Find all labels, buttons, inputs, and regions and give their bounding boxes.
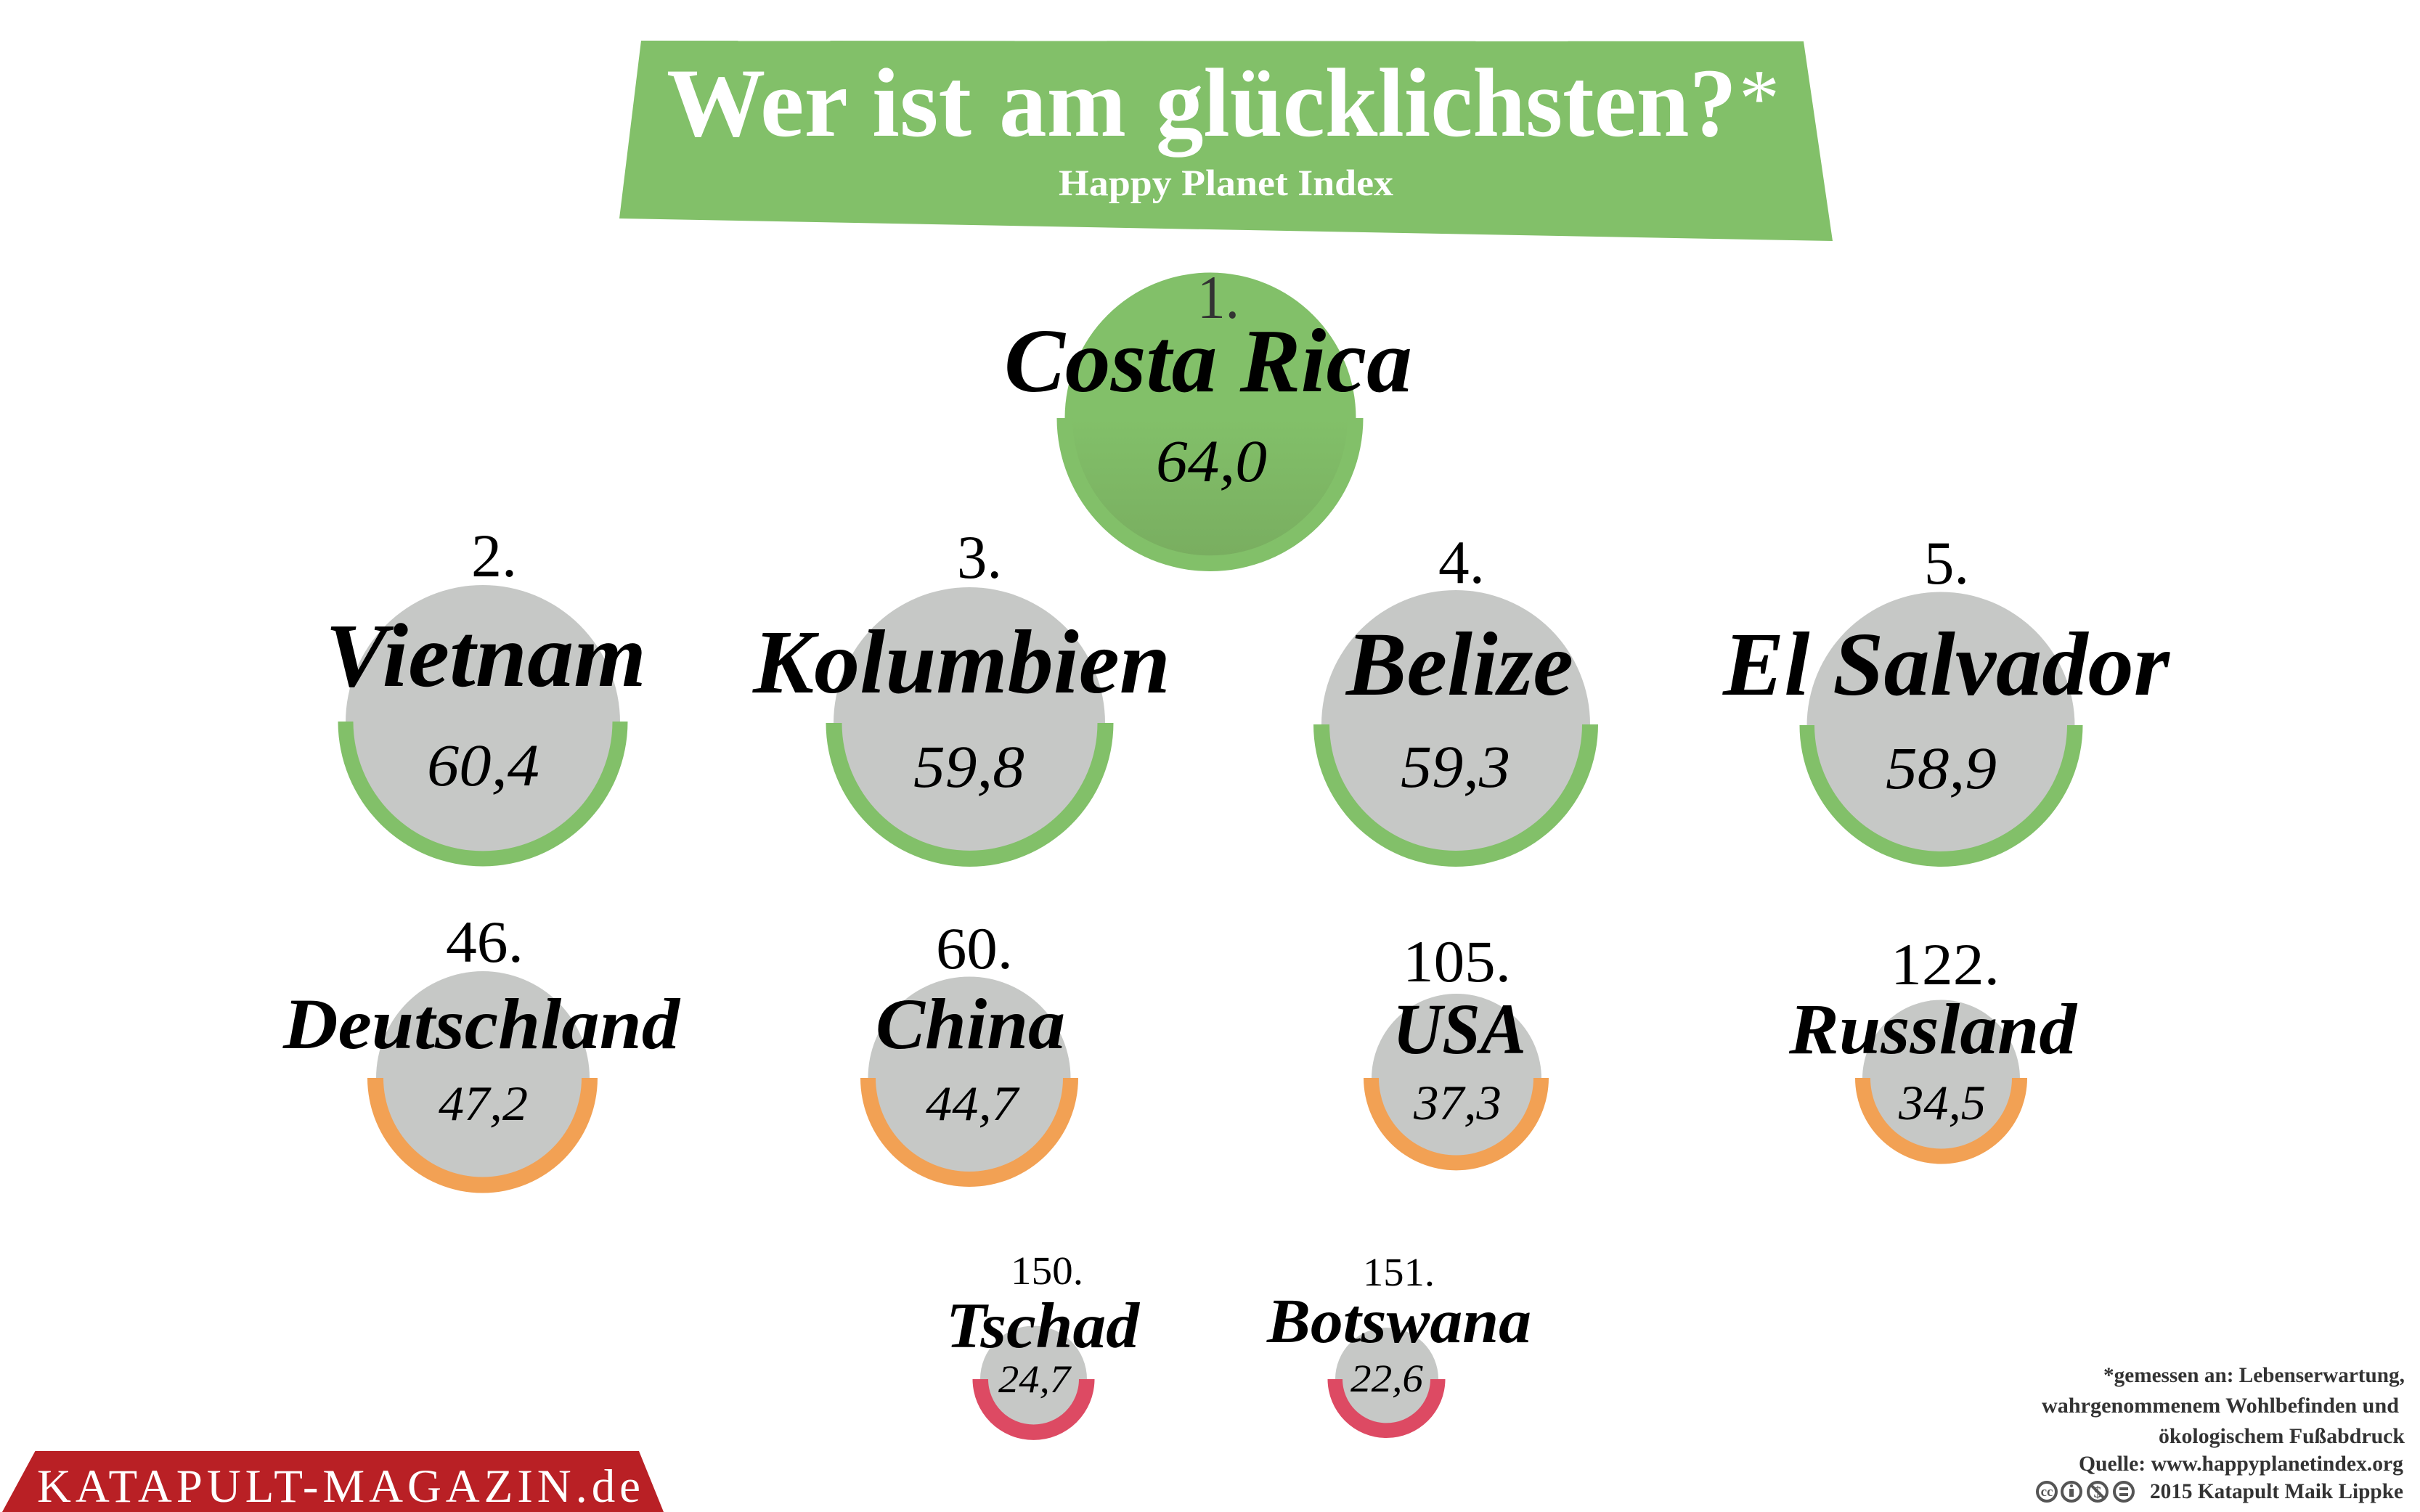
title asterisk: * bbox=[1739, 54, 1780, 144]
value: 44,7 bbox=[926, 1076, 1020, 1131]
ring bbox=[338, 722, 627, 867]
ring bbox=[1313, 724, 1598, 867]
rank: 150. bbox=[1011, 1249, 1083, 1293]
value: 64,0 bbox=[1156, 428, 1267, 494]
footnote and source bbox=[2037, 1363, 2405, 1503]
country: Belize bbox=[1313, 528, 1598, 867]
ring bbox=[1364, 1078, 1549, 1170]
value: 59,3 bbox=[1401, 733, 1510, 800]
name: USA bbox=[1393, 989, 1526, 1069]
name: El Salvador bbox=[1722, 615, 2170, 715]
score circle bbox=[1321, 590, 1590, 859]
country: Russland bbox=[1788, 931, 2078, 1164]
value: 34,5 bbox=[1898, 1075, 1986, 1130]
ring bbox=[973, 1379, 1095, 1440]
ring bbox=[367, 1078, 598, 1193]
ring bbox=[1327, 1379, 1445, 1438]
name: Kolumbien bbox=[752, 613, 1170, 713]
rank: 60. bbox=[936, 915, 1013, 981]
name: Belize bbox=[1345, 615, 1573, 715]
value: 59,8 bbox=[913, 733, 1024, 800]
ring bbox=[826, 723, 1114, 867]
country: Deutschland bbox=[282, 909, 681, 1193]
title: ist bbox=[872, 49, 971, 158]
rank: 2. bbox=[471, 522, 517, 590]
value: 22,6 bbox=[1350, 1357, 1423, 1400]
rank: 1. bbox=[1197, 263, 1239, 332]
footnote line 3: ökologischem Fußabdruck bbox=[2159, 1424, 2405, 1448]
country: Tschad bbox=[946, 1249, 1141, 1440]
score circle bbox=[1806, 592, 2075, 859]
name: Russland bbox=[1788, 989, 2078, 1069]
banner shape bbox=[619, 41, 1833, 241]
footnote line 2: wahrgenommenem Wohlbefinden und bbox=[2042, 1394, 2399, 1418]
rank: 122. bbox=[1891, 931, 2000, 997]
icon: cc letters: cc bbox=[2041, 1484, 2053, 1500]
score circle bbox=[868, 977, 1070, 1179]
name: China bbox=[876, 984, 1065, 1064]
value: 58,9 bbox=[1886, 735, 1997, 801]
ring bbox=[1057, 418, 1364, 571]
score circle bbox=[1862, 1000, 2020, 1157]
name: Costa Rica bbox=[1004, 311, 1412, 412]
subtitle: Happy Planet Index bbox=[1059, 163, 1394, 204]
title: am bbox=[999, 49, 1126, 158]
country: Botswana bbox=[1266, 1250, 1531, 1438]
rank: 3. bbox=[957, 523, 1002, 592]
country: Kolumbien bbox=[752, 523, 1170, 867]
score circle bbox=[1372, 994, 1541, 1164]
score circle bbox=[1335, 1328, 1438, 1431]
copyright line: 2015 Katapult Maik Lippke bbox=[2150, 1479, 2403, 1503]
value: 47,2 bbox=[439, 1076, 528, 1131]
value: 60,4 bbox=[427, 732, 539, 798]
name: Deutschland bbox=[282, 984, 681, 1064]
ring bbox=[1855, 1078, 2027, 1164]
inner shaded half bbox=[1072, 418, 1348, 555]
title: glücklichsten? bbox=[1156, 49, 1737, 158]
name: Tschad bbox=[946, 1291, 1141, 1362]
rank: 5. bbox=[1924, 529, 1969, 597]
banner text: KATAPULT-MAGAZIN.de bbox=[37, 1460, 640, 1512]
rank: 46. bbox=[446, 909, 523, 975]
footnote text: *gemessen an: Lebenserwartung, bbox=[2103, 1363, 2405, 1387]
name: Botswana bbox=[1266, 1286, 1531, 1356]
magazine banner bbox=[2, 1451, 664, 1512]
score circle bbox=[834, 587, 1105, 859]
country: Costa Rica bbox=[1004, 263, 1412, 571]
source: Quelle: www.happyplanetindex.org bbox=[2079, 1452, 2403, 1476]
icon: dollar sign: $ bbox=[2094, 1483, 2101, 1501]
country: USA bbox=[1364, 928, 1549, 1170]
title: Wer bbox=[667, 49, 848, 158]
country: Vietnam bbox=[325, 522, 646, 867]
value: 24,7 bbox=[998, 1357, 1072, 1401]
rank: 151. bbox=[1363, 1250, 1435, 1294]
rank: 4. bbox=[1438, 528, 1485, 597]
country: China bbox=[860, 915, 1078, 1187]
name: Vietnam bbox=[325, 606, 646, 706]
ring bbox=[860, 1078, 1078, 1187]
score circle bbox=[376, 971, 590, 1185]
rank: 105. bbox=[1403, 928, 1511, 994]
score circle bbox=[346, 585, 620, 859]
country: El Salvador bbox=[1722, 529, 2170, 867]
title banner bbox=[619, 41, 1833, 241]
score circle bbox=[1064, 273, 1356, 563]
banner shape bbox=[2, 1451, 664, 1512]
title bbox=[667, 49, 1737, 158]
value: 37,3 bbox=[1413, 1075, 1502, 1130]
score circle bbox=[980, 1325, 1087, 1433]
ring bbox=[1799, 725, 2082, 867]
icon: creative commons licence bbox=[2037, 1482, 2133, 1501]
